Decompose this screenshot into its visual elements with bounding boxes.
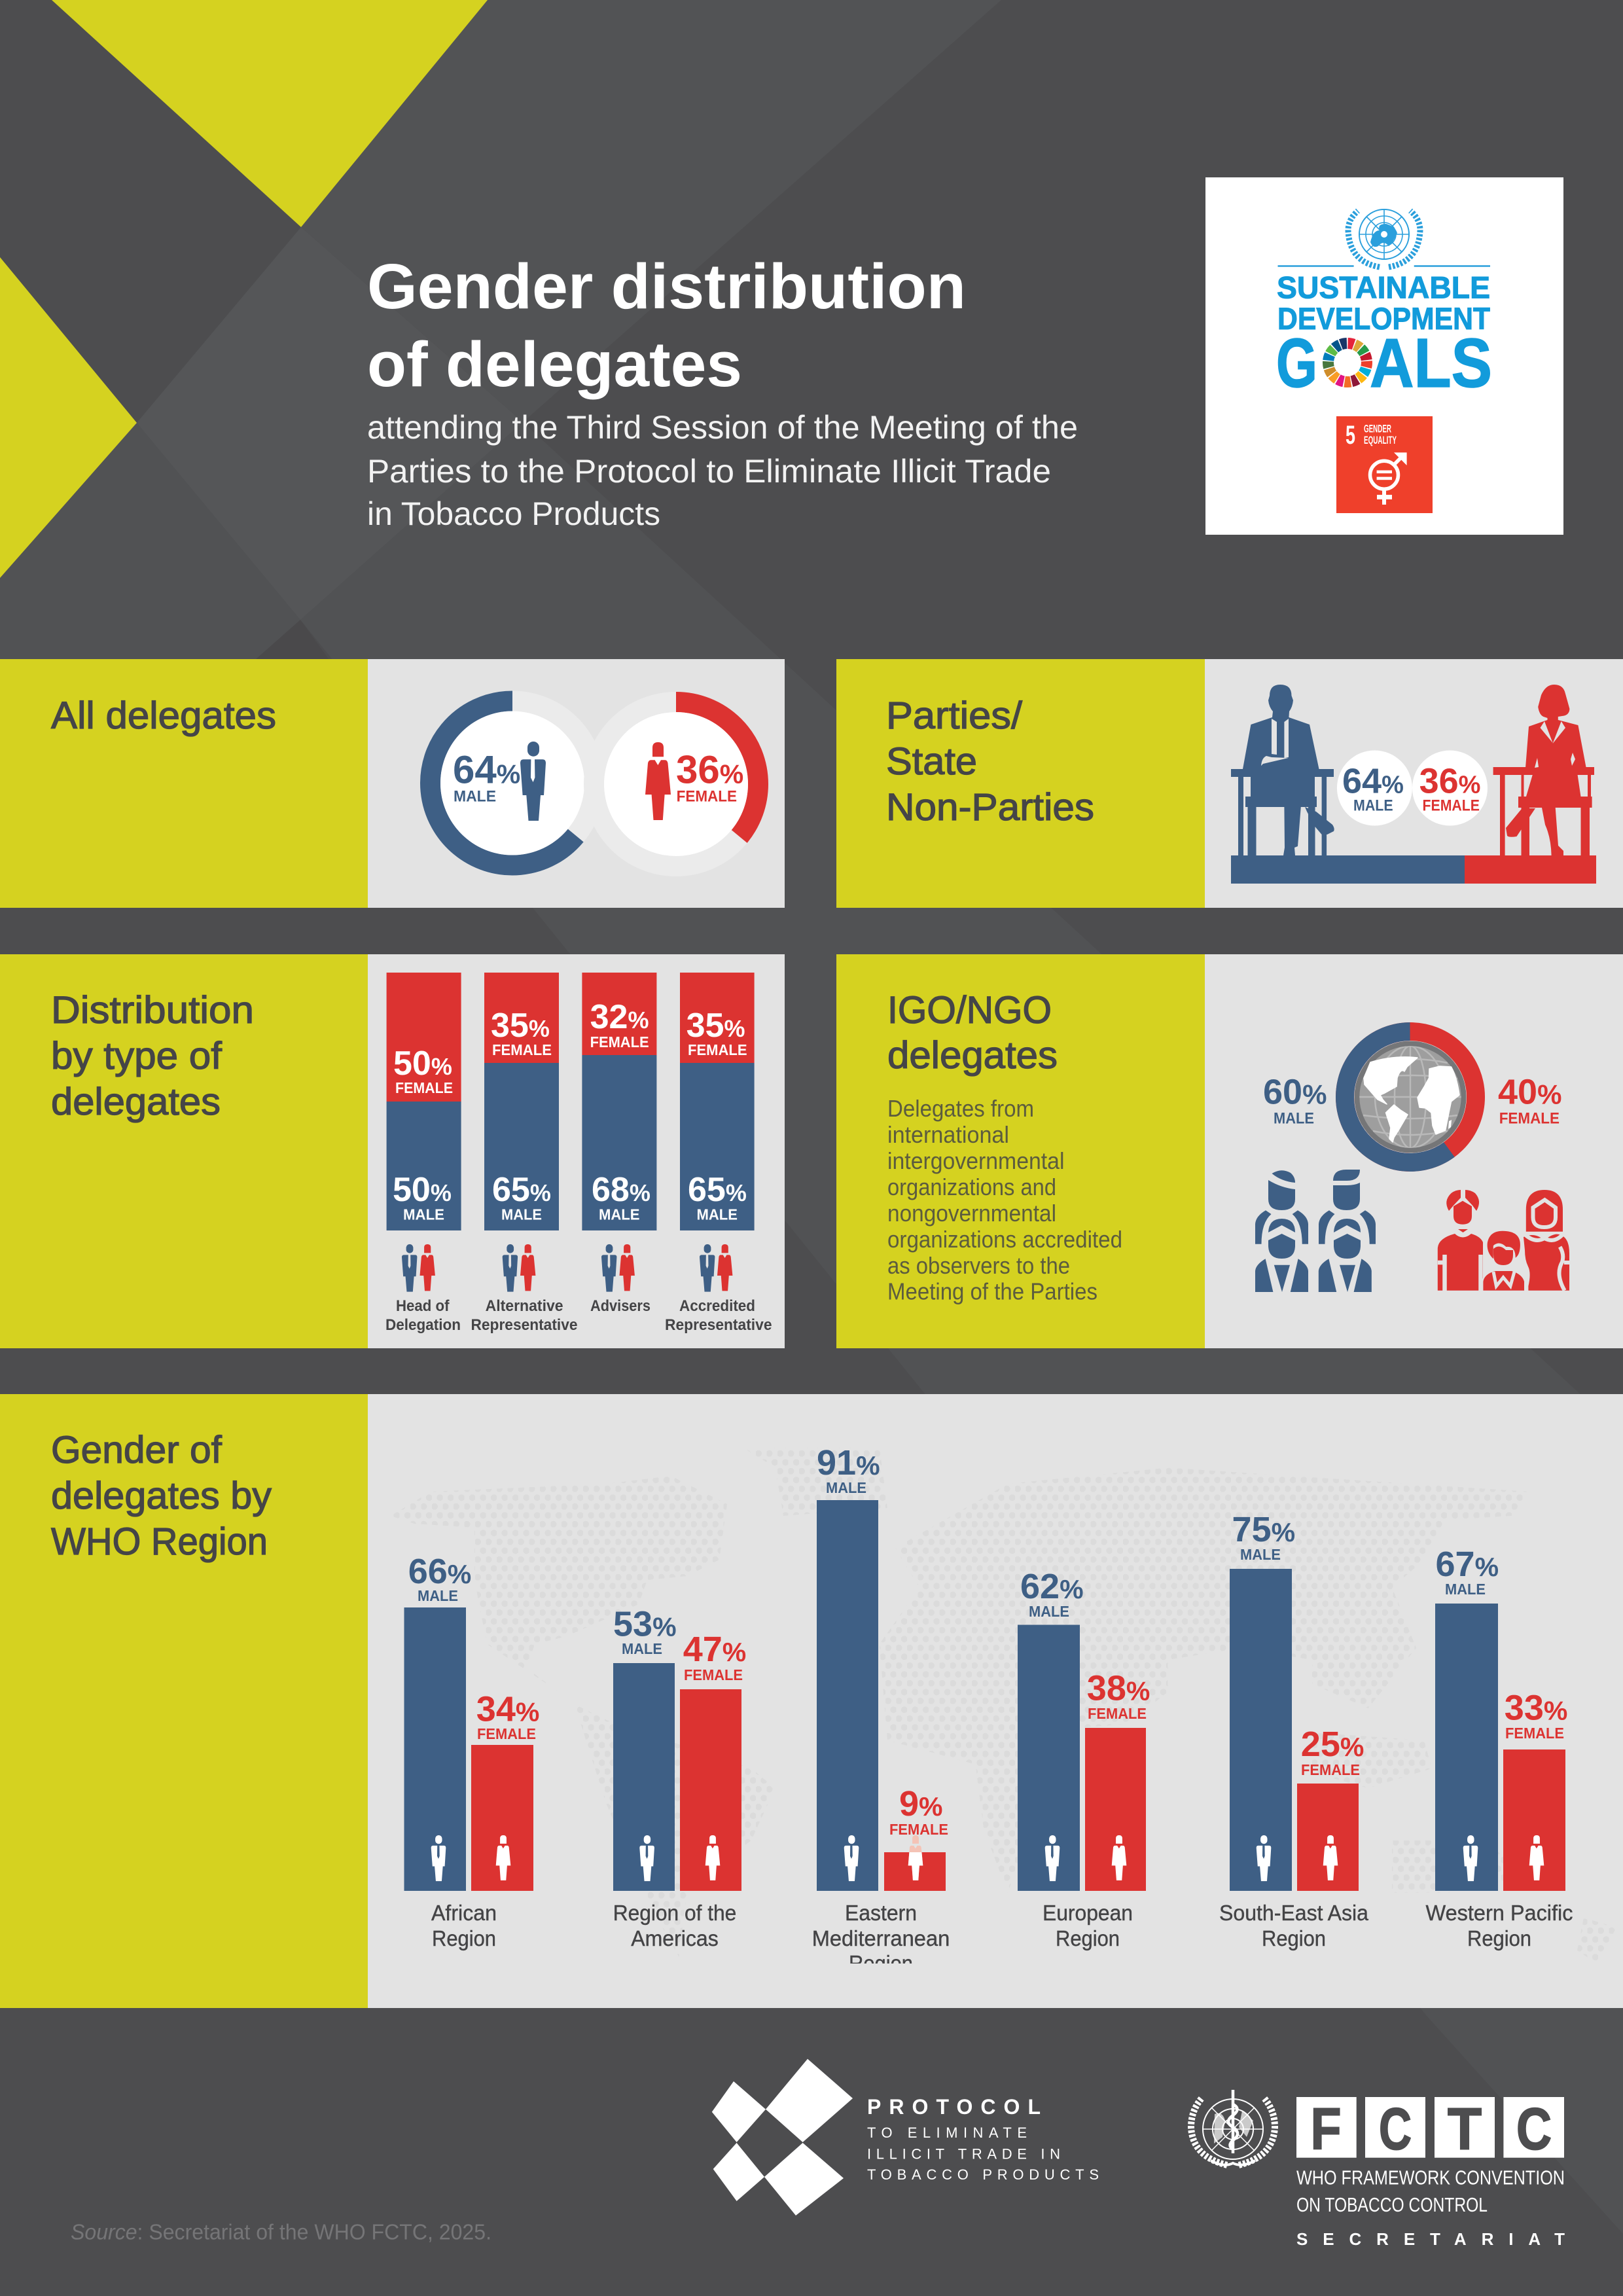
icon: group of men: [1255, 1170, 1376, 1292]
logo: FCTC wordmark: WHO FRAMEWORK CONVENTION: [1296, 2166, 1565, 2189]
label: european region: [1043, 1901, 1133, 1950]
bar: alternative representative: FEMALE: [492, 1041, 552, 1058]
label: african region: [431, 1901, 497, 1950]
logo: FCTC tiles: C: [1379, 2097, 1412, 2162]
text block: IGO/NGO description: organizations and: [887, 1174, 1056, 1200]
panel: IGO/NGO text: delegates: [887, 1034, 1058, 1077]
label: accredited representative: [665, 1297, 772, 1334]
text block: IGO/NGO description: intergovernmental: [887, 1147, 1064, 1174]
label: head of delegation: Delegation: [385, 1316, 461, 1334]
bar: advisers: MALE: [599, 1206, 640, 1223]
panel: WHO region heading: [0, 1394, 368, 2008]
label: region of the americas: Region of the: [613, 1901, 736, 1925]
subtitle: in Tobacco Products: [367, 495, 660, 532]
label: 64% male: %: [497, 759, 520, 789]
bar group: Region of the Americas: MALE: [622, 1640, 662, 1657]
icon: SDG 5 gender equality tile: 5: [1346, 421, 1355, 450]
bar group: Region of the Americas: [613, 1605, 746, 1950]
icon: seated man: [1231, 685, 1334, 855]
label: 40% female: 40%: [1498, 1073, 1561, 1112]
icon: figure pair, head of delegation: [402, 1244, 435, 1292]
label: 36% female: FEMALE: [677, 788, 737, 806]
label: eastern mediterranean region: Region: [849, 1951, 913, 1975]
bar group: Eastern Mediterranean Region: FEMALE: [889, 1821, 948, 1838]
bar: accredited representative: MALE: [696, 1206, 738, 1223]
label: head of delegation: Head of: [396, 1297, 450, 1315]
icon: SDG 5 gender equality tile: [1336, 416, 1433, 513]
title: Gender distribution: [367, 251, 966, 322]
bar group: Eastern Mediterranean Region: 91%: [817, 1443, 880, 1482]
label: european region: European: [1043, 1901, 1133, 1925]
icon: SDG 5 gender equality tile: GENDER: [1364, 423, 1391, 435]
bar group: European Region: FEMALE: [1088, 1705, 1147, 1722]
label: alternative representative: Alternative: [486, 1297, 563, 1315]
logo: protocol mark: [712, 2059, 853, 2215]
label: south-east asia region: [1219, 1901, 1369, 1950]
bar group: South-East Asia Region: 75%: [1232, 1510, 1295, 1549]
source note: Source: Secretariat of the WHO FCTC, 2025.: [71, 2220, 491, 2244]
icon: SDG colour wheel: [1320, 335, 1375, 390]
bar group: Eastern Mediterranean Region: 9%: [899, 1784, 943, 1823]
callout: 64% male: 64%: [1342, 762, 1404, 801]
logo: protocol wordmark: ILLICIT TRADE IN: [867, 2145, 1060, 2162]
panel: WHO region heading: delegates by: [51, 1475, 272, 1517]
panel: parties heading: Parties/: [886, 694, 1023, 737]
bar: accredited representative: [680, 973, 755, 1230]
label: western pacific region: Western Pacific: [1425, 1901, 1573, 1925]
label: 64% male: 64: [453, 748, 497, 792]
bar: accredited representative: 65%: [688, 1171, 747, 1209]
bar group: Eastern Mediterranean Region: [812, 1443, 950, 1975]
bar group: Eastern Mediterranean Region: MALE: [826, 1479, 866, 1496]
panel: parties heading: Non-Parties: [886, 786, 1094, 829]
label: south-east asia region: Region: [1262, 1926, 1326, 1950]
bar group: European Region: MALE: [1029, 1603, 1069, 1620]
text block: IGO/NGO description: as observers to the: [887, 1252, 1070, 1279]
title: [367, 251, 966, 400]
bar: head of delegation: 50%: [393, 1171, 452, 1209]
heading: sustainable development: DEVELOPMENT: [1277, 301, 1490, 336]
label: 60% male: MALE: [1274, 1110, 1314, 1128]
subtitle: attending the Third Session of the Meeting of the: [367, 409, 1078, 446]
bar group: European Region: 38%: [1087, 1669, 1150, 1708]
chart: male donut 64%: [397, 668, 628, 899]
callout: 36% female: FEMALE: [1423, 797, 1480, 814]
bar group: South-East Asia Region: [1219, 1510, 1369, 1950]
bar: head of delegation: MALE: [403, 1206, 444, 1223]
panel: parties heading: State: [886, 740, 977, 783]
text block: IGO/NGO description: Delegates from: [887, 1095, 1034, 1122]
bar: alternative representative: 35%: [491, 1007, 550, 1045]
panel: parties chart: [1205, 659, 1623, 908]
title: of delegates: [367, 329, 742, 400]
callout: 36% female: [1412, 750, 1488, 826]
text block: IGO/NGO description: nongovernmental: [887, 1200, 1056, 1227]
panel: all delegates chart: [368, 659, 785, 908]
icon: female figure: [645, 742, 671, 820]
label: western pacific region: Region: [1467, 1926, 1531, 1950]
label: accredited representative: Accredited: [679, 1297, 755, 1315]
logo: protocol wordmark: TOBACCO PRODUCTS: [867, 2166, 1099, 2183]
label: region of the americas: [613, 1901, 736, 1950]
panel: distribution heading: delegates: [51, 1081, 221, 1123]
label: african region: Region: [432, 1926, 496, 1950]
panel: distribution heading: [0, 954, 368, 1348]
bar: head of delegation: [387, 973, 461, 1230]
callout: 64% male: [1337, 750, 1412, 826]
panel: WHO region heading: Gender of: [51, 1429, 223, 1471]
chart: female donut 36%: [594, 702, 758, 867]
bar group: European Region: [1018, 1567, 1150, 1950]
icon: SDG 5 gender equality tile: EQUALITY: [1364, 434, 1397, 446]
panel: SDG logo: [1205, 177, 1563, 535]
label: 60% male: 60%: [1263, 1073, 1327, 1112]
bar group: African Region: [404, 1552, 539, 1950]
icon: family group: [1438, 1190, 1569, 1291]
icon: figure pair, advisers: [601, 1244, 635, 1292]
bar group: Western Pacific Region: [1425, 1545, 1573, 1950]
bar group: African Region: MALE: [418, 1587, 458, 1604]
label: head of delegation: [385, 1297, 461, 1334]
logo: protocol wordmark: PROTOCOL: [867, 2095, 1041, 2119]
heading: goals: ALS: [1370, 325, 1492, 402]
bar group: South-East Asia Region: FEMALE: [1301, 1761, 1360, 1778]
label: eastern mediterranean region: Mediterranean: [812, 1926, 950, 1950]
logo: WHO emblem: [1191, 2090, 1275, 2165]
icon: figure pair, alternative representative: [503, 1244, 535, 1292]
label: alternative representative: [471, 1297, 577, 1334]
icon: figure pair, accredited representative: [700, 1244, 732, 1292]
bar: head of delegation: 50%: [393, 1045, 452, 1083]
panel: distribution heading: Distribution: [51, 989, 254, 1031]
panel: IGO/NGO text: [836, 954, 1205, 1348]
chart: globe donut 60/40: [1336, 1022, 1485, 1172]
text block: IGO/NGO description: organizations accredited: [887, 1226, 1122, 1253]
label: region of the americas: Americas: [631, 1926, 719, 1950]
bar: accredited representative: 35%: [687, 1007, 745, 1045]
bar: alternative representative: 65%: [492, 1171, 551, 1209]
bar group: Western Pacific Region: 33%: [1505, 1689, 1567, 1728]
panel: WHO region chart: [368, 1394, 1623, 2008]
label: 64% male: MALE: [454, 788, 496, 806]
bar group: Region of the Americas: FEMALE: [684, 1666, 743, 1683]
bar: alternative representative: MALE: [501, 1206, 542, 1223]
label: accredited representative: Representative: [665, 1316, 772, 1334]
label: european region: Region: [1056, 1926, 1120, 1950]
label: eastern mediterranean region: Eastern: [845, 1901, 917, 1925]
icon: UN emblem: [1348, 209, 1420, 267]
logo: FCTC tiles: F: [1310, 2097, 1342, 2162]
bar group: Region of the Americas: 47%: [683, 1630, 746, 1669]
bar group: African Region: 34%: [476, 1690, 539, 1729]
label: south-east asia region: South-East Asia: [1219, 1901, 1369, 1925]
logo: protocol wordmark: TO ELIMINATE: [867, 2125, 1027, 2141]
logo: FCTC wordmark: SECRETARIAT: [1296, 2229, 1565, 2249]
bar group: African Region: FEMALE: [477, 1725, 536, 1742]
text block: IGO/NGO description: [887, 1095, 1122, 1305]
decorative dotted world map: [391, 1448, 1616, 1964]
label: 64% male: [453, 748, 520, 806]
bar group: African Region: 66%: [408, 1552, 471, 1591]
label: 36% female: 36%: [676, 748, 743, 792]
panel: distribution heading: by type of: [51, 1035, 223, 1077]
panel: all delegates heading: All delegates: [51, 694, 276, 737]
heading: goals: G: [1276, 325, 1317, 402]
logo: protocol wordmark: [867, 2095, 1099, 2183]
panel: IGO/NGO text: IGO/NGO: [887, 989, 1052, 1031]
logo: FCTC tiles: T: [1448, 2097, 1482, 2162]
logo: FCTC tiles: [1296, 2097, 1564, 2162]
heading: sustainable development: [1277, 270, 1490, 336]
label: eastern mediterranean region: [813, 1905, 949, 1964]
panel: all delegates heading: [0, 659, 368, 908]
bar group: European Region: 62%: [1020, 1567, 1084, 1606]
bar: advisers: FEMALE: [590, 1033, 649, 1050]
icon: male figure: [520, 742, 546, 821]
divider lines: [1277, 265, 1490, 267]
label: advisers: Advisers: [590, 1297, 651, 1315]
panel: IGO/NGO chart: [1205, 954, 1623, 1348]
subtitle: [367, 409, 1078, 532]
logo: FCTC wordmark: ON TOBACCO CONTROL: [1296, 2193, 1488, 2216]
label: 40% female: FEMALE: [1499, 1110, 1560, 1128]
bar group: South-East Asia Region: 25%: [1301, 1725, 1364, 1764]
bar: male/female split base: [1231, 855, 1596, 884]
callout: 36% female: 36%: [1419, 762, 1480, 801]
panel: WHO region heading: WHO Region: [51, 1520, 268, 1563]
label: alternative representative: Representative: [471, 1316, 577, 1334]
logo: FCTC tiles: C: [1516, 2097, 1552, 2162]
bar: advisers: [582, 973, 656, 1230]
subtitle: Parties to the Protocol to Eliminate Illicit Trade: [367, 453, 1051, 490]
bar: head of delegation: FEMALE: [395, 1079, 453, 1096]
heading: sustainable development: SUSTAINABLE: [1277, 270, 1490, 305]
logo: FCTC wordmark: [1296, 2166, 1565, 2249]
bar group: Region of the Americas: 53%: [613, 1605, 677, 1644]
bar group: Western Pacific Region: 67%: [1436, 1545, 1499, 1584]
panel: distribution chart: [368, 954, 785, 1348]
label: african region: African: [431, 1901, 497, 1925]
bar group: South-East Asia Region: MALE: [1240, 1546, 1281, 1563]
bar: accredited representative: FEMALE: [688, 1041, 747, 1058]
callout: 64% male: MALE: [1353, 797, 1393, 814]
bar group: Western Pacific Region: FEMALE: [1505, 1725, 1564, 1742]
bar: advisers: 32%: [590, 998, 649, 1036]
icon: seated woman: [1493, 685, 1594, 855]
bar group: Western Pacific Region: MALE: [1445, 1581, 1486, 1598]
text block: IGO/NGO description: Meeting of the Parties: [887, 1278, 1097, 1305]
bar: advisers: 68%: [592, 1171, 651, 1209]
label: western pacific region: [1425, 1901, 1573, 1950]
panel: parties heading: [836, 659, 1205, 908]
heading: goals: [1276, 325, 1492, 402]
bar: alternative representative: [484, 973, 559, 1230]
text block: IGO/NGO description: international: [887, 1121, 1009, 1148]
